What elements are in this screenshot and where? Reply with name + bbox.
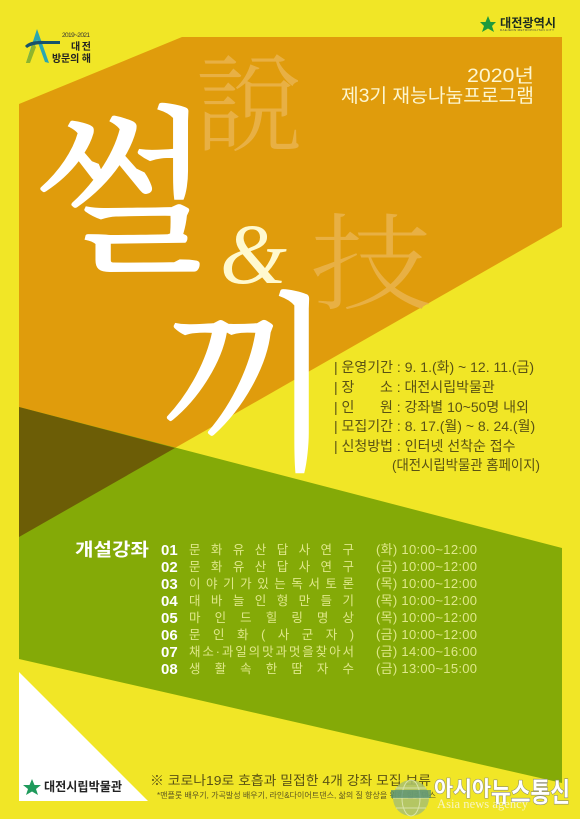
info list: | 신청방법 : 인터넷 선착순 접수 bbox=[334, 438, 516, 454]
logo: Daejeon Metropolitan City: DAEJEON METROPOLITAN CITY bbox=[500, 28, 554, 32]
logo: Daejeon visit year: 대전 bbox=[71, 40, 91, 53]
footnote: *맨플룻 배우기, 가곡발성 배우기, 라인&다이어트댄스, 삶의 질 향상을 위한 힐링댄스 bbox=[157, 790, 436, 800]
schedule times: (금) 10:00~12:00 bbox=[376, 559, 477, 574]
info list: (대전시립박물관 홈페이지) bbox=[392, 457, 540, 473]
schedule numbers: 02 bbox=[161, 559, 178, 576]
schedule course names bbox=[189, 543, 354, 676]
info list: | 장 bbox=[334, 379, 355, 395]
schedule numbers bbox=[161, 542, 178, 678]
schedule course names: 문인화(사군자) bbox=[189, 628, 354, 642]
watermark: agency name: Asia news agency bbox=[437, 797, 529, 811]
main title: 썰: 썰 bbox=[32, 97, 214, 296]
schedule times: (금) 10:00~12:00 bbox=[376, 627, 477, 642]
schedule heading: 개설강좌 bbox=[75, 540, 149, 560]
schedule times: (목) 10:00~12:00 bbox=[376, 610, 477, 625]
logo: Daejeon visit year: 방문의 해 bbox=[52, 52, 91, 65]
schedule times: (목) 10:00~12:00 bbox=[376, 593, 477, 608]
schedule course names: 생활속한땀자수 bbox=[189, 662, 354, 676]
schedule numbers: 05 bbox=[161, 610, 178, 627]
program title bbox=[341, 65, 534, 107]
info list: 원 : 강좌별 10~50명 내외 bbox=[380, 399, 529, 415]
schedule numbers: 04 bbox=[161, 593, 178, 610]
panel: white corner triangle bbox=[19, 672, 148, 801]
hanja: 技 watermark: 技 bbox=[310, 207, 432, 324]
panel: green shape bbox=[19, 407, 562, 783]
logo: Daejeon visit year: 2019~2021 bbox=[62, 32, 90, 39]
schedule numbers: 06 bbox=[161, 627, 178, 644]
schedule times bbox=[376, 542, 477, 676]
overlap: dark olive wedge bbox=[19, 407, 175, 537]
schedule times: (목) 10:00~12:00 bbox=[376, 576, 477, 591]
logo: Daejeon Metropolitan City bbox=[480, 16, 556, 32]
notice: ※ 코로나19로 호흡과 밀접한 4개 강좌 모집 보류 bbox=[150, 773, 431, 788]
schedule course names: 이야기가있는독서토론 bbox=[189, 577, 354, 591]
program title: 제3기 재능나눔프로그램 bbox=[341, 85, 534, 107]
schedule times: (화) 10:00~12:00 bbox=[376, 542, 477, 557]
schedule course names: 문화유산답사연구 bbox=[189, 543, 354, 557]
schedule times: (금) 14:00~16:00 bbox=[376, 644, 477, 659]
info list bbox=[334, 359, 540, 473]
schedule course names: 마인드힐링명상 bbox=[189, 611, 354, 625]
info list: 소 : 대전시립박물관 bbox=[380, 379, 495, 395]
info list: | 인 bbox=[334, 399, 354, 415]
main title: ampersand: & bbox=[220, 206, 287, 302]
logo: Daejeon visit year bbox=[25, 29, 91, 65]
main title: 끼: 끼 bbox=[160, 284, 337, 494]
logo: Daejeon Museum bbox=[23, 779, 122, 795]
schedule course names: 문화유산답사연구 bbox=[189, 560, 354, 574]
watermark: agency name: 아시아 bbox=[434, 778, 491, 801]
watermark: globe bbox=[391, 780, 431, 816]
logo: Daejeon Metropolitan City: 대전광역시 bbox=[500, 16, 556, 30]
schedule numbers: 01 bbox=[161, 542, 178, 559]
info list: | 모집기간 : 8. 17.(월) ~ 8. 24.(월) bbox=[334, 418, 535, 434]
schedule course names: 채소·과일의맛과멋을찾아서 bbox=[189, 645, 354, 659]
logo: Daejeon Museum: 대전시립박물관 bbox=[44, 780, 122, 794]
schedule times: (금) 13:00~15:00 bbox=[376, 661, 477, 676]
hanja: 說 watermark: 說 bbox=[196, 49, 302, 166]
schedule numbers: 07 bbox=[161, 644, 178, 661]
panel: orange shape bbox=[19, 37, 562, 537]
info list: | 운영기간 : 9. 1.(화) ~ 12. 11.(금) bbox=[334, 359, 534, 375]
watermark: agency name bbox=[434, 778, 570, 811]
schedule numbers: 03 bbox=[161, 576, 178, 593]
schedule numbers: 08 bbox=[161, 661, 178, 678]
schedule course names: 대바늘인형만들기 bbox=[189, 594, 354, 608]
program title: 2020년 bbox=[467, 65, 534, 87]
